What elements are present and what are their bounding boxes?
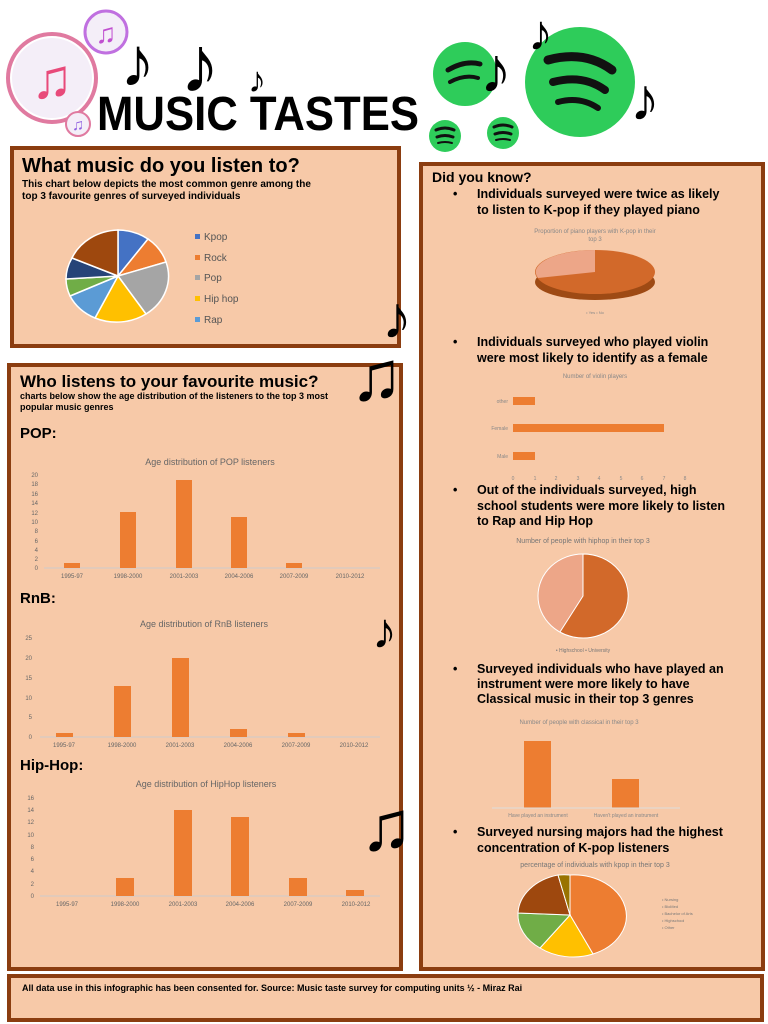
bar chart: HipHop: 1998-2000 [111,902,140,908]
panel: did you know [421,164,763,969]
panel: who listens: popular music genres [20,402,114,412]
bar chart: RnB: 2010-2012 [340,743,369,749]
bar chart: POP: 16 [31,492,39,498]
bar chart: violin: 3 [577,476,580,482]
bar chart: violin: 2 [555,476,558,482]
bar chart: RnB: 20 [25,656,33,662]
heading: Who listens to your favourite music? [20,372,318,391]
legend: Rap [204,315,223,326]
pie chart: hiphop: • Highschool • University [556,648,611,654]
header [8,5,660,152]
bar chart: HipHop: 16 [27,796,35,802]
bar chart: POP: 14 [31,501,39,507]
bar chart: POP: 1998-2000 [114,574,143,580]
bar chart: POP: 2001-2003 [170,574,199,580]
panel: who listens [9,365,401,969]
fact 5: • [453,825,457,839]
bar chart: HipHop: 14 [27,808,35,814]
bar chart: HipHop: 4 [31,869,35,875]
bar chart: HipHop: 2007-2009 [284,902,313,908]
fact 4: instrument were more likely to have [477,677,690,691]
bar chart: RnB: 1995-97 [53,743,76,749]
bar chart: RnB: 15 [25,676,33,682]
fact 3 [453,483,725,528]
icon: apple music tiny [66,112,90,136]
bar chart: RnB: 2001-2003 [166,743,195,749]
icon: notes: ♪ [180,20,220,109]
bar chart: violin: 6 [641,476,644,482]
fact 5 [453,825,724,855]
fact 1: to listen to K-pop if they played piano [477,203,700,217]
icon: apple music large [8,34,96,122]
bar chart: POP: 20 [31,473,39,479]
bar chart: RnB: 0 [29,735,33,741]
bar chart: POP: 2010-2012 [336,574,365,580]
fact 2: Individuals surveyed who played violin [477,335,708,349]
pie chart: piano [534,229,656,315]
pie chart: kpop majors: • Other [662,925,675,930]
bar chart: POP: 6 [35,539,39,545]
bar chart: HipHop: 6 [31,857,35,863]
icon: notes: ♪ [248,59,266,100]
bar chart: POP: 2 [35,557,39,563]
bar chart: RnB: 10 [25,696,33,702]
fact 4: Classical music in their top 3 genres [477,692,694,706]
bar chart: violin: 4 [598,476,601,482]
bar chart: RnB: 1998-2000 [108,743,137,749]
fact 3: • [453,483,457,497]
pie chart: hiphop: Number of people with hiphop in their top 3 [516,538,650,545]
bar chart: HipHop: 2001-2003 [169,902,198,908]
icon: apple music small [85,11,127,53]
bar chart: violin: 7 [663,476,666,482]
pie chart: genres [66,230,169,322]
bar chart: POP: 12 [31,511,39,517]
legend: Rock [204,253,228,264]
pie chart: piano: • Yes • No [586,310,605,315]
bar chart: classical: Haven't played an instrument [594,813,659,819]
icon: notes right [480,5,660,133]
heading: What music do you listen to? [22,155,300,177]
bar chart: classical [492,720,680,819]
bar chart: violin [491,374,687,482]
fact 2: were most likely to identify as a female [476,351,708,365]
bar chart: RnB: Age distribution of RnB listeners [140,619,269,629]
icon: notes right: ♪ [480,34,512,106]
icon: notes: ♪ [120,23,155,101]
legend [195,232,239,326]
fact 2: • [453,335,457,349]
pie chart: piano: Proportion of piano players with K-pop in their [534,229,656,235]
pie chart: hiphop [516,538,650,654]
pie chart: kpop majors: • Highschool [662,918,684,923]
pie chart: kpop majors: • Nursing [662,897,678,902]
bar chart: HipHop: 2 [31,882,35,888]
icon: notes right: ♪ [630,66,660,133]
bar chart: POP: 4 [35,548,39,554]
bar chart: HipHop: 1995-97 [56,902,79,908]
pie chart: piano: top 3 [588,237,602,243]
fact 3: Out of the individuals surveyed, high [477,483,696,497]
fact 4 [453,662,724,706]
bar chart: violin: 8 [684,476,687,482]
footer [9,976,762,1020]
bar chart: POP [31,457,380,580]
bar chart: violin: 0 [512,476,515,482]
bar chart: HipHop: 8 [31,845,35,851]
bar chart: RnB: 2004-2006 [224,743,253,749]
pie chart: kpop majors [518,862,693,957]
legend: Pop [204,273,222,284]
bar chart: POP: Age distribution of POP listeners [145,457,275,467]
heading: Hip-Hop: Hip-Hop: [20,757,83,774]
bar chart: POP: 10 [31,520,39,526]
bar chart: RnB: 2007-2009 [282,743,311,749]
icon: notes [120,20,266,109]
text block: This chart below depicts the most common genre among the [22,179,311,190]
bar chart: classical: Number of people with classical in their top 3 [519,720,639,726]
bar chart: POP: 0 [35,566,39,572]
panel: what music [12,148,399,346]
icon: notes right: ♪ [528,5,553,61]
bar chart: POP: 8 [35,529,39,535]
panel: what music: top 3 favourite genres of surveyed individuals [22,191,241,202]
fact 1: • [453,187,457,201]
icon: notes between panels: ♪ [372,603,397,659]
fact 1: Individuals surveyed were twice as likely [477,187,720,201]
pie chart: kpop majors: percentage of individuals with kpop in their top 3 [520,862,670,869]
fact 5: Surveyed nursing majors had the highest [477,825,724,839]
bar chart: POP: 2004-2006 [225,574,254,580]
bar chart: classical: Have played an instrument [508,813,568,819]
fact 5: concentration of K-pop listeners [477,841,669,855]
fact 4: • [453,662,457,676]
bar chart: RnB [25,619,380,749]
footer: All data use in this infographic has been consented for. Source: Music taste survey for computing units ½ - Miraz Rai [22,983,522,993]
bar chart: violin: Male [497,454,508,460]
icon: notes between panels: ♪ [382,284,412,351]
bar chart: POP: 18 [31,482,39,488]
icon: spotify logos [429,27,635,152]
icon: notes between panels: ♫ [360,787,412,865]
text block: charts below show the age distribution of the listeners to the top 3 most [20,391,328,401]
bar chart: violin: Female [491,426,508,432]
heading: Did you know? [432,169,532,185]
bar chart: HipHop: 0 [31,894,35,900]
legend: Hip hop [204,294,239,305]
title: MUSIC TASTES [97,88,419,141]
bar chart: HipHop: 2010-2012 [342,902,371,908]
bar chart: violin: 1 [534,476,537,482]
bar chart: HipHop: 2004-2006 [226,902,255,908]
bar chart: POP: 2007-2009 [280,574,309,580]
bar chart: violin: other [497,399,508,405]
bar chart: HipHop: Age distribution of HipHop listeners [136,779,277,789]
icon: notes between panels: ♫ [350,337,402,415]
bar chart: HipHop: 10 [27,833,35,839]
bar chart: violin: Number of violin players [563,374,627,380]
pie chart: kpop majors: • BioMed [662,904,678,909]
icon: apple music small: ♫ [96,18,116,49]
fact 3: school students were more likely to listen [477,499,725,513]
heading: POP: POP: [20,425,57,442]
bar chart: POP: 1995-97 [61,574,84,580]
icon: apple music tiny: ♫ [72,117,84,134]
legend: Kpop [204,232,228,243]
bar chart: HipHop [27,779,380,908]
icon: apple music large: ♫ [31,47,73,110]
bar chart: RnB: 5 [29,715,33,721]
heading: RnB: RnB: [20,590,56,607]
bar chart: RnB: 25 [25,636,33,642]
bar chart: HipHop: 12 [27,820,35,826]
fact 4: Surveyed individuals who have played an [477,662,724,676]
fact 1 [453,187,720,217]
bar chart: violin: 5 [620,476,623,482]
icon: notes between panels [350,284,412,865]
pie chart: kpop majors: • Bachelor of Arts [662,911,693,916]
fact 2 [453,335,708,365]
fact 3: to Rap and Hip Hop [477,514,593,528]
